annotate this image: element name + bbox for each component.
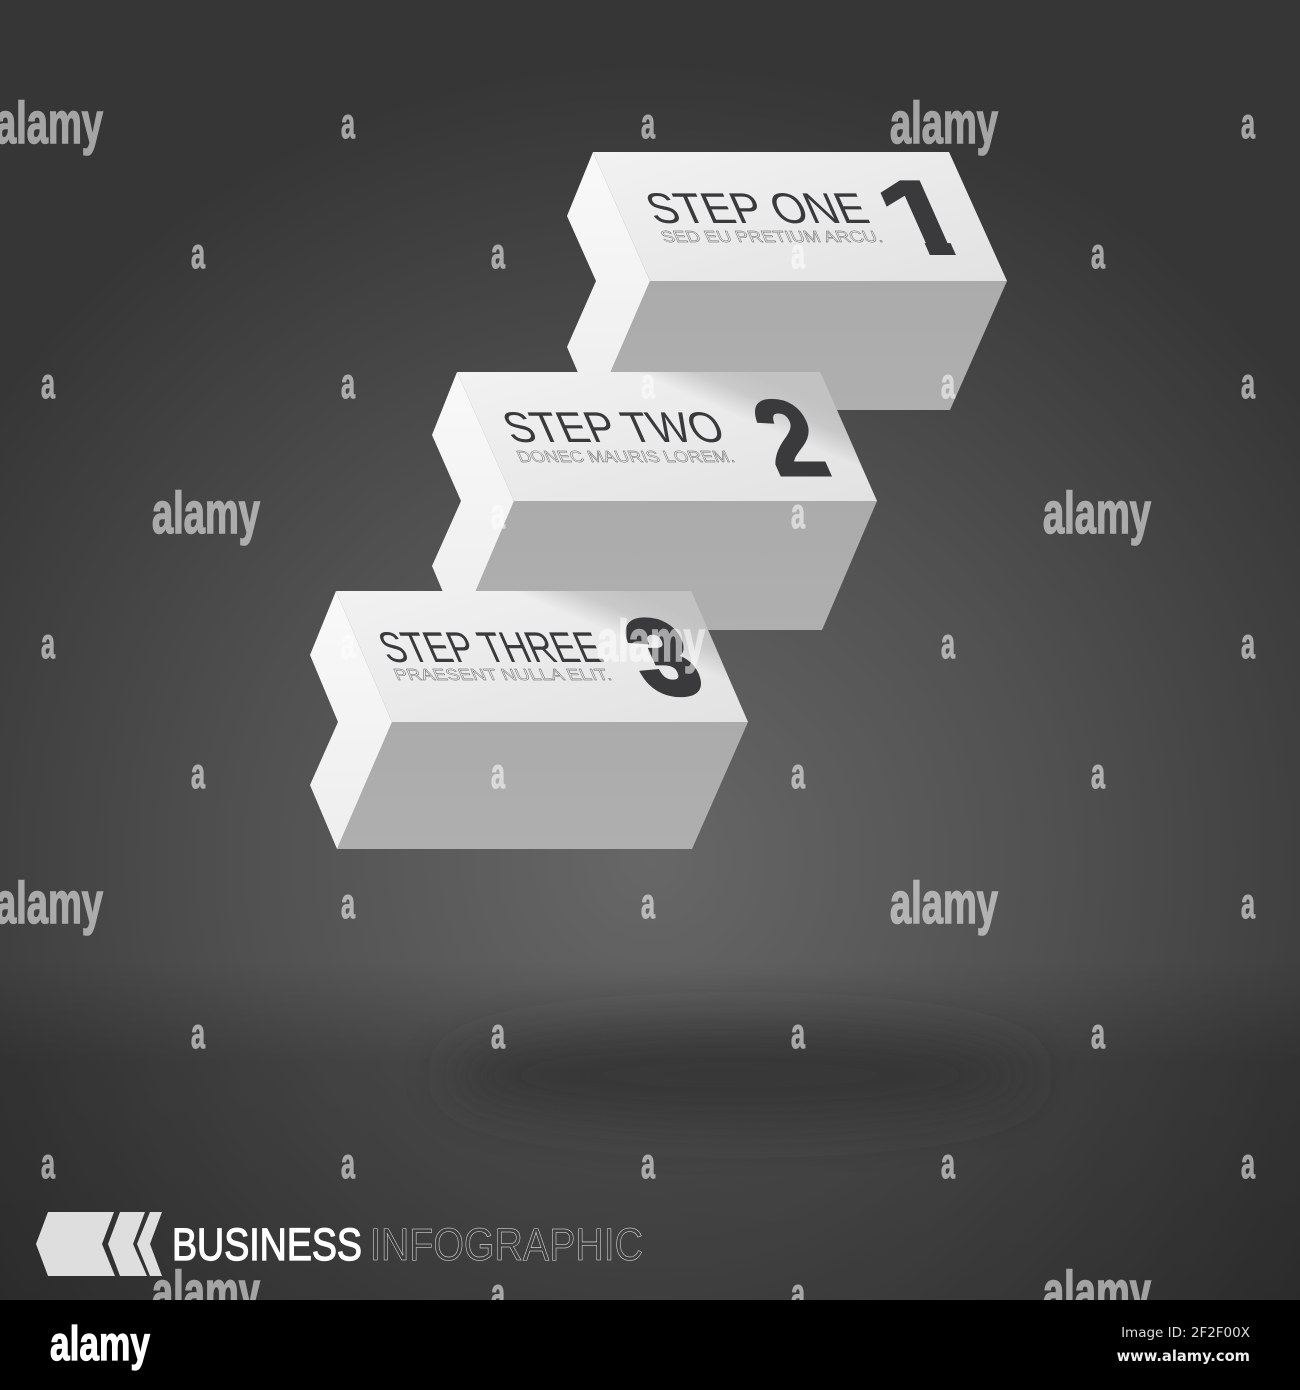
watermark: small letters: a: [641, 360, 656, 408]
watermark: small letters: a: [941, 360, 956, 408]
watermark: small letters: a: [341, 1140, 356, 1188]
icon: chevron arrows: [36, 1212, 162, 1276]
watermark: small letters: a: [1091, 230, 1106, 278]
watermark: small letters: a: [341, 880, 356, 928]
cast shadow on block 3: [475, 591, 733, 687]
watermark: alamy wordmarks: alamy: [890, 871, 998, 936]
step one title: STEP ONE: [638, 184, 876, 233]
watermark: small letters: a: [341, 100, 356, 148]
watermark: alamy wordmarks: alamy: [152, 1260, 260, 1325]
watermark: small letters: a: [1091, 1010, 1106, 1058]
watermark: small letters: a: [1241, 100, 1256, 148]
floor shadow: [450, 1027, 1030, 1123]
watermark: small letters: a: [791, 490, 806, 538]
heading: business infographic: INFOGRAPHIC: [370, 1219, 643, 1270]
watermark: small letters: a: [941, 620, 956, 668]
watermark: small letters: a: [791, 750, 806, 798]
watermark: small letters: a: [791, 1270, 806, 1318]
watermark: small letters: a: [341, 360, 356, 408]
number 2: 2: [735, 378, 844, 498]
heading: business infographic: [172, 1219, 643, 1270]
image id: Image ID: 2F2F00X: [1121, 1325, 1250, 1341]
watermark: alamy wordmarks: alamy: [152, 481, 260, 546]
heading: business infographic: BUSINESS: [172, 1219, 362, 1270]
step block 3: [310, 591, 748, 849]
step one subtitle: SED EU PRETIUM ARCU.: [658, 228, 886, 246]
step two title: STEP TWO: [495, 403, 732, 452]
watermark: small letters: a: [491, 750, 506, 798]
watermark: alamy wordmarks: alamy: [597, 609, 705, 674]
footer bar: [0, 1300, 1300, 1390]
number 1: 1: [857, 159, 988, 278]
watermark: small letters: a: [41, 1140, 56, 1188]
watermark: small letters: a: [191, 1010, 206, 1058]
watermark: small letters: a: [791, 1010, 806, 1058]
watermark: small letters: a: [191, 750, 206, 798]
watermark: small letters: a: [1241, 880, 1256, 928]
watermark: small letters: a: [341, 620, 356, 668]
step three subtitle: PRAESENT NULLA ELIT.: [391, 666, 615, 684]
watermark: small letters: a: [1241, 1140, 1256, 1188]
number 3: 3: [608, 600, 718, 716]
watermark: small letters: a: [191, 230, 206, 278]
website: www.alamy.com: [1117, 1348, 1250, 1365]
footer logo: alamy: [50, 1318, 150, 1371]
watermark: small letters: a: [641, 100, 656, 148]
watermark: small letters: a: [491, 230, 506, 278]
step block 1: [567, 152, 1007, 410]
watermark: alamy wordmarks: [0, 91, 1151, 1325]
step block 2: [432, 372, 877, 630]
watermark: small letters: a: [1091, 750, 1106, 798]
watermark: small letters: a: [491, 1270, 506, 1318]
watermark: alamy wordmarks: alamy: [1043, 1260, 1151, 1325]
watermark: small letters: a: [491, 1010, 506, 1058]
watermark: small letters: a: [791, 230, 806, 278]
watermark: alamy wordmarks: alamy: [1043, 481, 1151, 546]
watermark: small letters: a: [41, 360, 56, 408]
watermark: small letters: a: [1241, 620, 1256, 668]
watermark: alamy wordmarks: alamy: [890, 91, 998, 156]
watermark: small letters: a: [641, 1140, 656, 1188]
step three title: STEP THREE: [371, 623, 610, 672]
watermark: small letters: a: [41, 620, 56, 668]
watermark: small letters: a: [491, 490, 506, 538]
watermark: small letters: a: [641, 880, 656, 928]
cast shadow on block 2: [611, 372, 862, 466]
watermark: small letters: a: [941, 1140, 956, 1188]
watermark: small letters: a: [1241, 360, 1256, 408]
step two subtitle: DONEC MAURIS LOREM.: [514, 448, 738, 466]
